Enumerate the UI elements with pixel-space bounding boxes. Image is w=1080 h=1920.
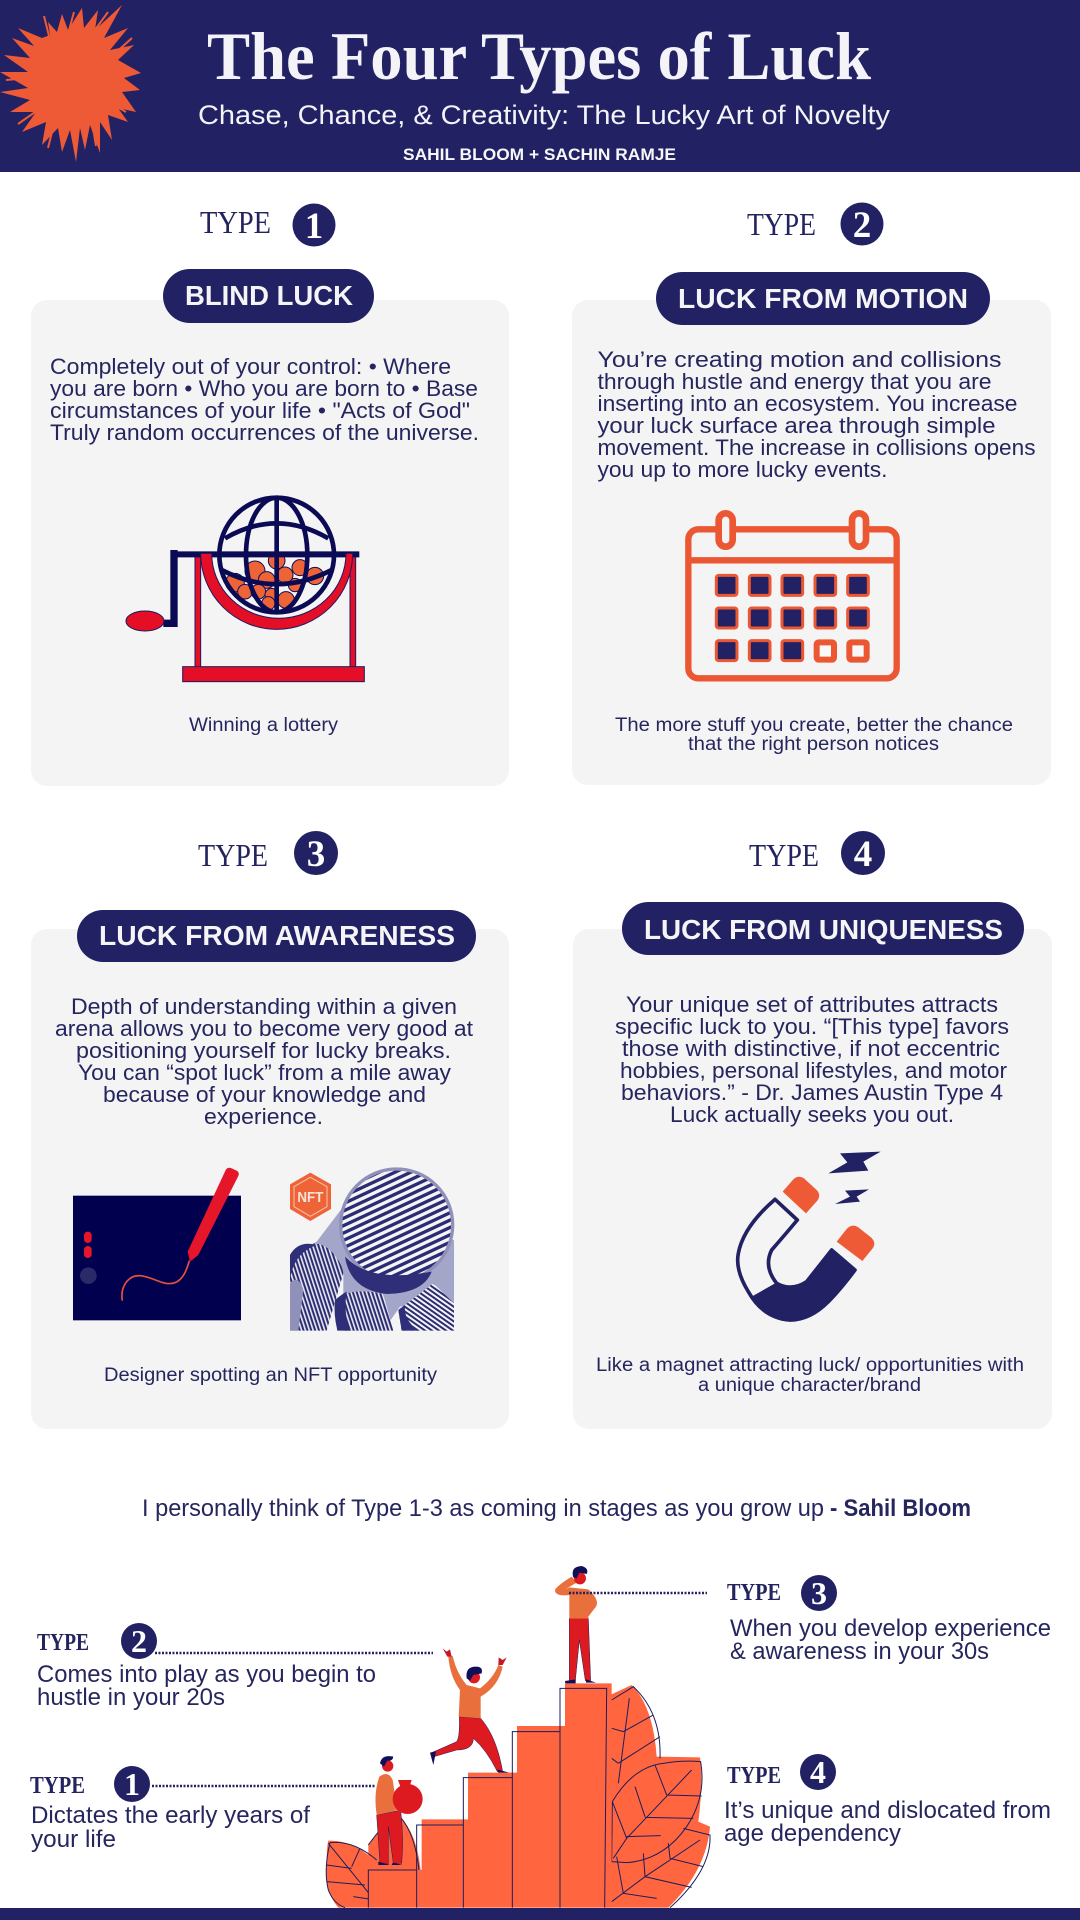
timeline: type 4 [724, 1754, 1051, 1847]
heading: type 2: 2 [853, 205, 871, 246]
text block: arena allows you to become very good at [55, 1016, 474, 1041]
illustration: people climbing stairs [326, 1566, 710, 1908]
header banner [0, 0, 1080, 172]
text block [50, 354, 479, 445]
timeline: type 1: your life [31, 1826, 116, 1853]
timeline: type 3: & awareness in your 30s [730, 1638, 989, 1665]
text block: Your unique set of attributes attracts [626, 992, 998, 1017]
pill: blind luck: BLIND LUCK [185, 280, 353, 311]
panel: type 4 luck from uniqueness [573, 831, 1052, 1429]
panel: type 3 luck from awareness [31, 831, 509, 1429]
stairs [368, 1683, 612, 1908]
text block: hobbies, personal lifestyles, and motor [620, 1058, 1008, 1083]
heading: type 4: 4 [854, 834, 872, 875]
illustration: nft artwork [290, 1168, 454, 1331]
timeline: type 1: Dictates the early years of [31, 1802, 310, 1829]
text block [615, 992, 1009, 1127]
timeline: type 2 [37, 1623, 433, 1711]
heading: type 4: TYPE [749, 837, 819, 873]
text block: those with distinctive, if not eccentric [622, 1036, 1000, 1061]
caption: that the right person notices [688, 734, 939, 755]
heading: type 1: 1 [305, 206, 323, 247]
caption [596, 1355, 1024, 1396]
footer bar [0, 1908, 1080, 1920]
text block: inserting into an ecosystem. You increase [598, 391, 1018, 416]
heading: type 1: TYPE [200, 204, 271, 240]
text block: Depth of understanding within a given [71, 994, 457, 1019]
pill: luck from motion [656, 272, 990, 325]
caption: Winning a lottery [189, 715, 339, 736]
caption: Designer spotting an NFT opportunity [104, 1365, 438, 1386]
heading: type 4 [749, 831, 885, 875]
pill: luck from motion: LUCK FROM MOTION [678, 283, 968, 314]
timeline: type 2: 2 [131, 1623, 147, 1659]
quote line: - Sahil Bloom [830, 1495, 971, 1522]
text block: behaviors.” - Dr. James Austin Type 4 [621, 1080, 1003, 1105]
text block [598, 347, 1036, 482]
caption [615, 715, 1013, 755]
back leaves [326, 1685, 710, 1908]
pill: luck from uniqueness: LUCK FROM UNIQUENESS [644, 914, 1003, 945]
text block: your luck surface area through simple [598, 413, 996, 438]
heading: type 2: TYPE [747, 206, 816, 242]
quote line: I personally think of Type 1-3 as coming in stages as you grow up [142, 1495, 824, 1522]
heading: type 1 [200, 204, 336, 247]
person with pot [375, 1756, 423, 1865]
timeline: type 1: 1 [124, 1766, 140, 1802]
timeline: type 4: age dependency [724, 1820, 902, 1847]
text block: You’re creating motion and collisions [598, 347, 1002, 372]
icon: calendar [688, 513, 897, 678]
text block: experience. [204, 1104, 323, 1129]
title: The Four Types of Luck [207, 18, 871, 94]
timeline: type 4: 4 [810, 1754, 826, 1790]
pill: blind luck [163, 269, 374, 323]
caption: a unique character/brand [698, 1375, 921, 1396]
timeline: type 2: Comes into play as you begin to [37, 1661, 376, 1688]
timeline: type 2: TYPE [37, 1630, 89, 1656]
panel: type 1 blind luck [31, 204, 509, 786]
text block: circumstances of your life • "Acts of God" [50, 398, 470, 423]
text block: through hustle and energy that you are [598, 369, 992, 394]
heading: type 3: TYPE [198, 837, 268, 873]
icon: magnet [738, 1152, 881, 1320]
text block: Completely out of your control: • Where [50, 354, 451, 379]
text block: You can “spot luck” from a mile away [78, 1060, 452, 1085]
pill: luck from awareness [77, 910, 476, 962]
text block: specific luck to you. “[This type] favors [615, 1014, 1009, 1039]
timeline: type 1 [30, 1766, 375, 1853]
icon: lottery drum [126, 498, 364, 682]
text block: Luck actually seeks you out. [670, 1102, 954, 1127]
timeline: type 1: TYPE [30, 1773, 85, 1799]
heading: type 2 [747, 202, 884, 246]
text block: you are born • Who you are born to • Base [50, 376, 478, 401]
timeline: type 3: When you develop experience [730, 1615, 1051, 1642]
icon: NFT badge [290, 1173, 331, 1221]
person jumping [430, 1648, 509, 1773]
timeline: type 4: TYPE [727, 1763, 781, 1789]
panel: type 2 luck from motion [572, 202, 1051, 785]
text block: positioning yourself for lucky breaks. [76, 1038, 451, 1063]
timeline: type 3: 3 [811, 1575, 827, 1611]
text block: you up to more lucky events. [598, 457, 888, 482]
text block: because of your knowledge and [103, 1082, 426, 1107]
subtitle: Chase, Chance, & Creativity: The Lucky Art of Novelty [198, 100, 891, 130]
icon: NFT badge: NFT [297, 1190, 323, 1206]
timeline: type 3: TYPE [727, 1580, 781, 1606]
text block [55, 994, 474, 1129]
text block: movement. The increase in collisions opens [598, 435, 1036, 460]
pill: luck from uniqueness [622, 902, 1024, 955]
timeline: type 3 [569, 1575, 1051, 1665]
icon: orange burst [0, 5, 141, 162]
heading: type 3 [198, 831, 338, 875]
text block: Truly random occurrences of the universe. [50, 420, 479, 445]
caption: Like a magnet attracting luck/ opportunities with [596, 1355, 1024, 1376]
person standing on top [555, 1566, 597, 1683]
timeline: type 4: It’s unique and dislocated from [724, 1797, 1051, 1824]
pill: luck from awareness: LUCK FROM AWARENESS [99, 920, 455, 951]
timeline: type 2: hustle in your 20s [37, 1684, 225, 1711]
caption: The more stuff you create, better the chance [615, 715, 1013, 736]
authors: SAHIL BLOOM + SACHIN RAMJE [403, 145, 676, 164]
icon: drawing tablet [73, 1168, 241, 1320]
heading: type 3: 3 [307, 834, 325, 875]
